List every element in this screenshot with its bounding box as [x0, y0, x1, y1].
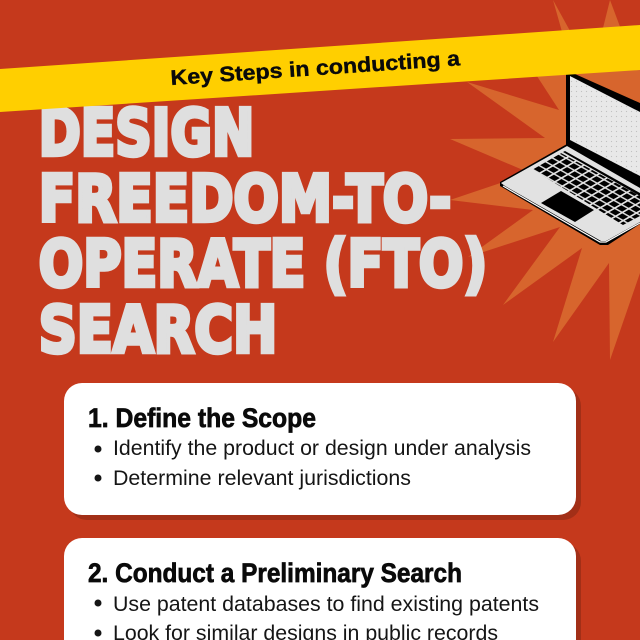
title: FREEDOM-TO- — [39, 163, 451, 237]
card 1 heading: 1. Define the Scope — [88, 403, 316, 433]
keyboard — [532, 153, 640, 225]
title: OPERATE (FTO) — [39, 228, 487, 302]
banner text: Key Steps in conducting a — [170, 47, 461, 90]
card 2 bullets — [94, 593, 539, 640]
trackpad — [541, 191, 594, 222]
banner — [0, 25, 640, 112]
card 2: preliminary search — [64, 538, 581, 640]
laptop illustration — [500, 70, 640, 245]
card 1 bullets: Identify the product or design under analysis — [113, 437, 531, 460]
laptop base — [500, 144, 640, 245]
card 1 bullets — [94, 437, 531, 490]
laptop screen — [566, 70, 640, 188]
card 2 bullets: Use patent databases to find existing patents — [113, 593, 539, 616]
starburst — [450, 0, 640, 360]
title: DESIGN — [39, 97, 254, 171]
title: SEARCH — [39, 294, 277, 368]
card 1 bullets: Determine relevant jurisdictions — [113, 467, 411, 490]
card 1: define the scope — [64, 383, 581, 520]
title — [39, 97, 487, 368]
card 2 heading: 2. Conduct a Preliminary Search — [88, 558, 462, 588]
